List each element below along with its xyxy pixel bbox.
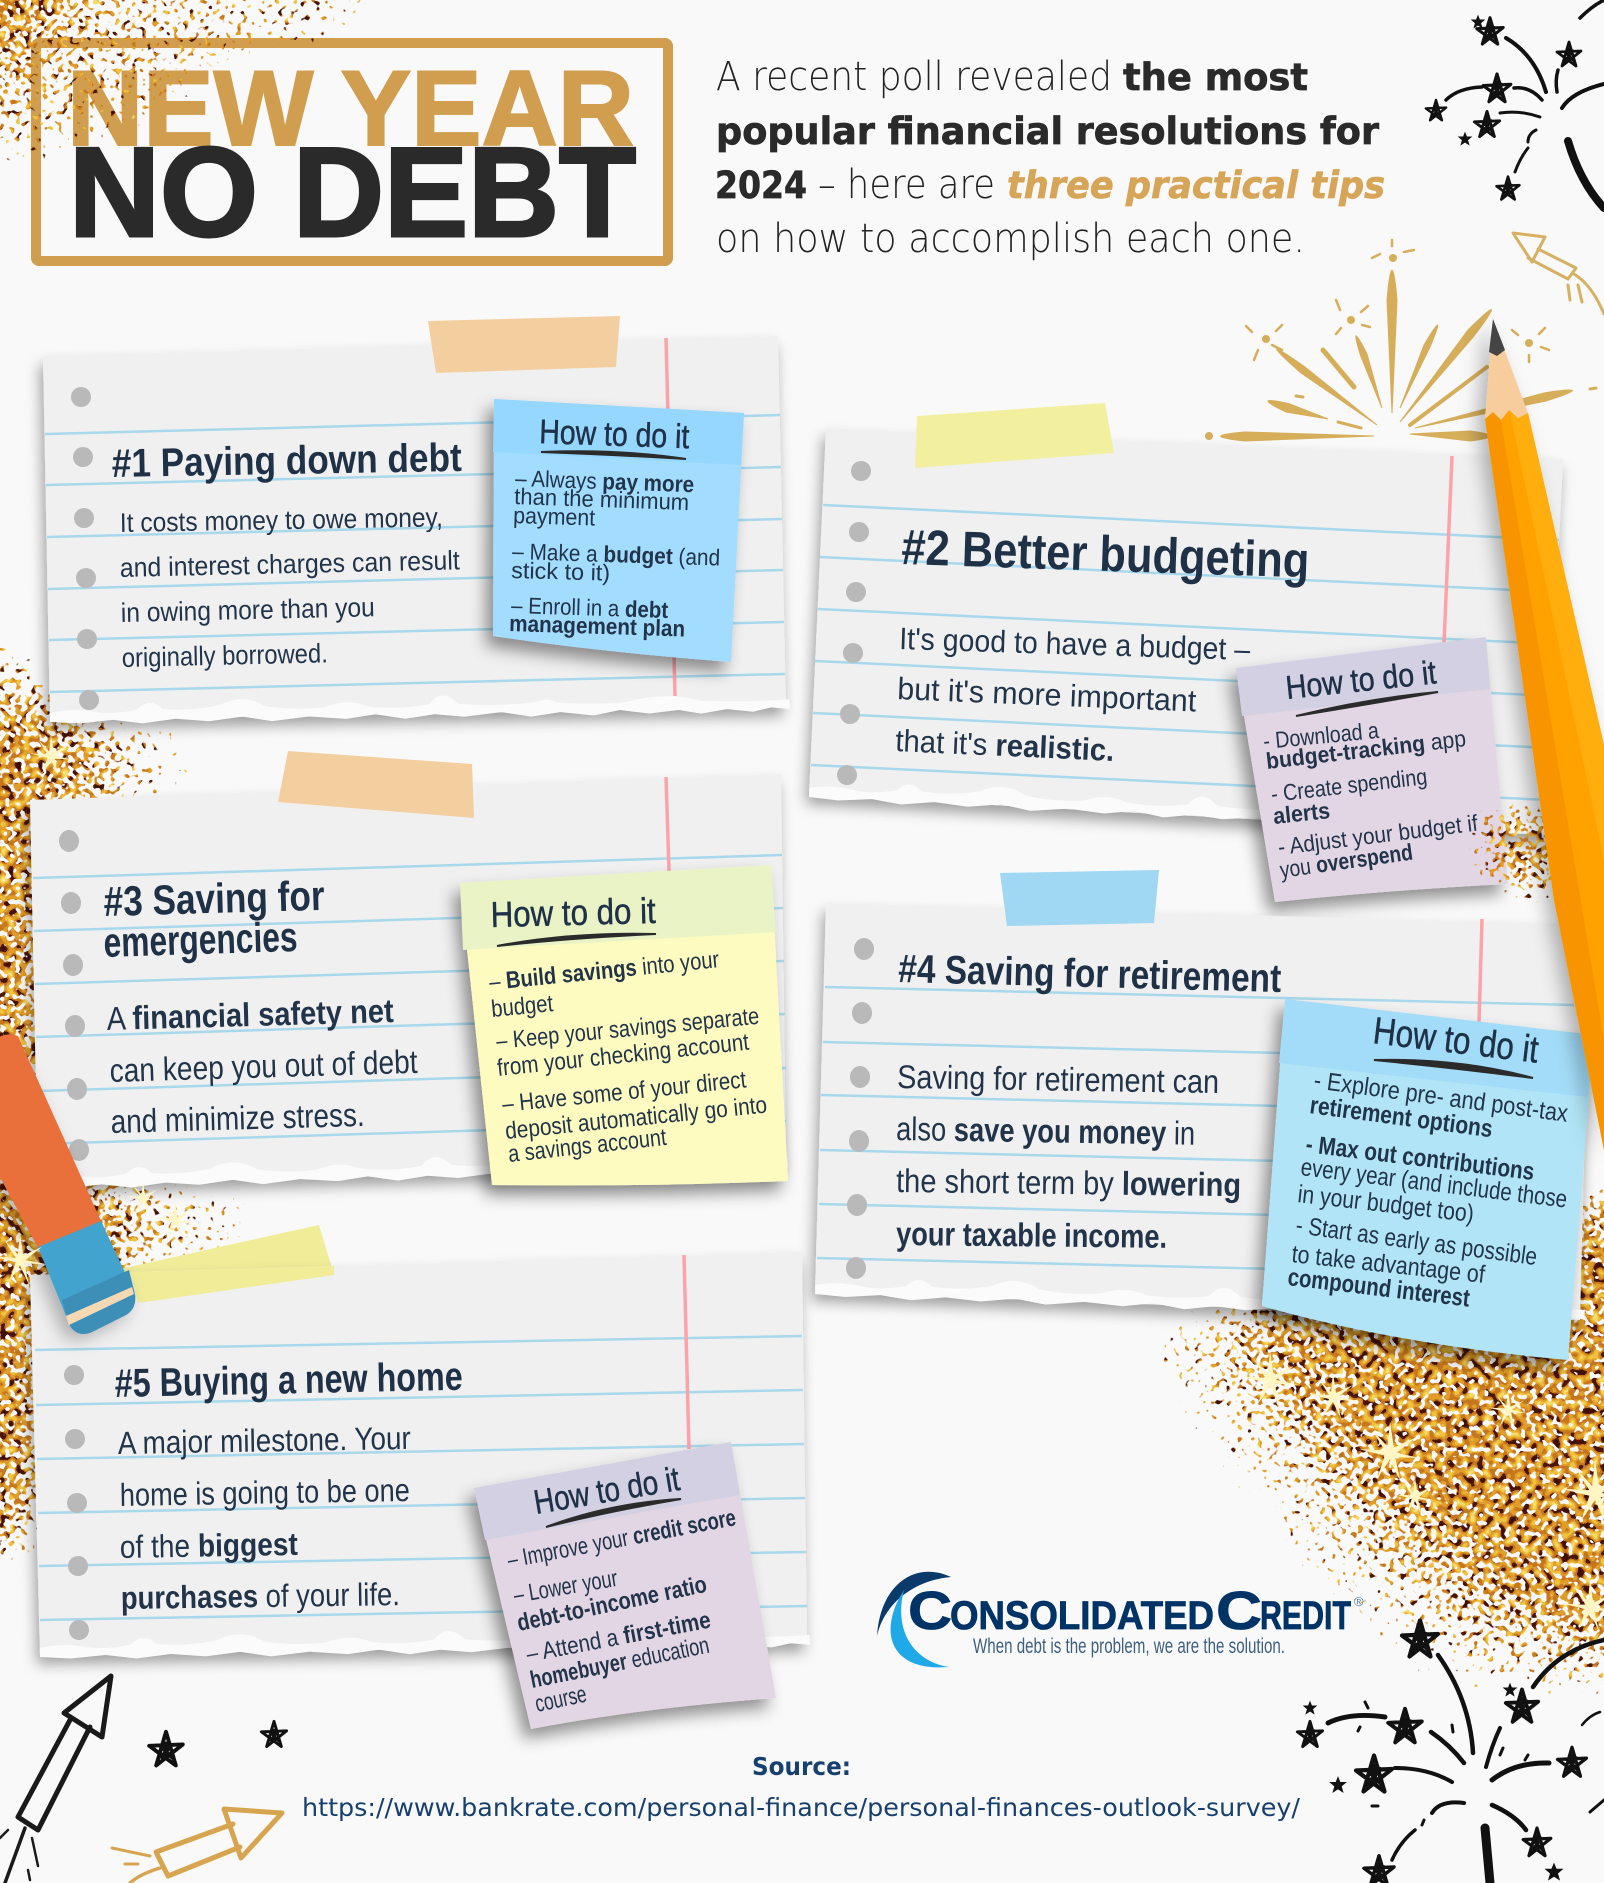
sticky note: how to do it: How to do it	[531, 1460, 683, 1522]
panel: card 2 better budgeting	[809, 403, 1563, 902]
sticky note: how to do it: – Attend a first-time	[524, 1607, 713, 1668]
paper sheet	[43, 336, 786, 720]
sticky note: how to do it: debt-to-income ratio	[515, 1571, 709, 1637]
sticky note: how to do it: – Lower your	[512, 1565, 620, 1609]
source heading: Source:	[752, 1752, 851, 1781]
sticky note: how to do it	[1262, 999, 1594, 1360]
sticky note: how to do it: – Enroll in a debt	[511, 592, 669, 623]
body text: home is going to be one	[119, 1472, 410, 1513]
sticky note: how to do it: - Adjust your budget if	[1276, 810, 1480, 860]
sticky note: how to do it: How to do it	[1284, 653, 1438, 706]
heading	[103, 872, 325, 966]
sticky note: how to do it: compound interest	[1286, 1263, 1472, 1313]
logo wordmark: ONSOLIDATED	[950, 1594, 1214, 1638]
body text: that it's realistic.	[895, 723, 1115, 768]
sticky note: how to do it: - Create spending	[1270, 763, 1429, 807]
body text: It's good to have a budget –	[899, 621, 1251, 667]
logo: Consolidated Credit: ®	[1354, 1594, 1364, 1609]
icon: pencil	[1485, 319, 1604, 1150]
sticky note: how to do it: – Keep your savings separate	[495, 1003, 760, 1055]
sticky note: how to do it: than the minimum	[514, 483, 690, 515]
body text: also save you money in	[896, 1110, 1195, 1152]
panel: card 1 paying down debt	[43, 316, 790, 725]
sticky note: how to do it: you overspend	[1278, 839, 1414, 883]
icon: black rocket	[0, 1676, 111, 1883]
sticky note: how to do it	[474, 1442, 776, 1729]
body text: purchases of your life.	[121, 1576, 400, 1616]
gold glitter background	[0, 560, 1604, 1740]
sticky note: how to do it: - Start as early as possible	[1294, 1211, 1539, 1271]
body text: but it's more important	[897, 671, 1197, 719]
icon: eraser	[0, 1034, 135, 1334]
sticky note: how to do it: a savings account	[507, 1124, 668, 1168]
sticky note: how to do it: deposit automatically go into	[504, 1092, 768, 1145]
icon: gold rocket bottom	[112, 1809, 282, 1883]
logo crescent	[877, 1572, 951, 1636]
body text: A financial safety net	[106, 992, 394, 1037]
firework: gold burst	[1205, 240, 1596, 441]
logo wordmark	[908, 1581, 1351, 1641]
sticky note: how to do it: - Explore pre- and post-tax	[1312, 1066, 1570, 1128]
body text: of the biggest	[119, 1526, 298, 1565]
paper sheet	[30, 774, 786, 1185]
firework: black bottom right	[1297, 1620, 1604, 1883]
body text: the short term by lowering	[896, 1162, 1241, 1203]
body text: It costs money to owe money,	[120, 502, 443, 538]
sticky note: how to do it	[493, 399, 744, 662]
body text: A major milestone. Your	[117, 1420, 411, 1461]
sticky note: how to do it	[1236, 637, 1508, 902]
sticky note: how to do it: stick to it)	[511, 557, 611, 586]
body text: and minimize stress.	[110, 1096, 365, 1140]
sticky note: how to do it: course	[533, 1681, 589, 1718]
paper sheet	[30, 1252, 807, 1655]
sticky note: how to do it: – Build savings into your	[488, 946, 720, 996]
intro paragraph: the most	[1123, 56, 1308, 99]
sticky note: how to do it: alerts	[1272, 797, 1331, 829]
heading: #4 Saving for retirement	[898, 947, 1282, 1001]
sticky note: how to do it	[460, 865, 788, 1186]
sticky note: how to do it: - Download a	[1262, 717, 1380, 754]
logo tagline: When debt is the problem, we are the solution.	[973, 1635, 1285, 1658]
intro paragraph: popular financial resolutions for	[716, 110, 1380, 153]
firework: black top right	[1426, 0, 1604, 208]
intro paragraph: on how to accomplish each one.	[716, 216, 1305, 262]
sticky note: how to do it: How to do it	[490, 890, 656, 935]
paper sheet	[815, 903, 1590, 1320]
heading: #1 Paying down debt	[111, 436, 462, 486]
body text: and interest charges can result	[119, 545, 460, 583]
tape	[1000, 870, 1159, 926]
icon: doodle stars	[149, 1721, 287, 1765]
tape	[120, 1225, 334, 1303]
body text: your taxable income.	[896, 1215, 1167, 1255]
body text: Saving for retirement can	[897, 1058, 1219, 1100]
panel: card 5 buying a new home	[30, 1225, 810, 1729]
sticky note: how to do it: payment	[513, 502, 596, 531]
tape	[915, 403, 1114, 468]
tape	[428, 316, 620, 373]
intro paragraph	[715, 54, 1385, 262]
intro paragraph: three practical tips	[1007, 164, 1385, 207]
body text	[117, 1420, 411, 1616]
intro paragraph: A recent poll revealed	[716, 54, 1112, 100]
heading: #5 Buying a new home	[114, 1355, 463, 1406]
title line: No Debt: NO DEBT	[69, 121, 636, 263]
body text: originally borrowed.	[121, 638, 328, 673]
sticky note: how to do it: – Make a budget (and	[512, 538, 721, 571]
heading: #3 Saving for	[103, 872, 325, 925]
sticky note: how to do it: from your checking account	[496, 1029, 751, 1082]
sticky note: how to do it: How to do it	[1371, 1010, 1541, 1072]
gold glitter overlay	[0, 0, 1604, 1340]
sticky note: how to do it: How to do it	[539, 413, 690, 456]
panel: card 4 saving for retirement	[815, 870, 1594, 1360]
paper sheet	[809, 428, 1563, 835]
source url: https://www.bankrate.com/personal-finance/personal-finances-outlook-survey/	[302, 1793, 1301, 1822]
title box	[36, 43, 668, 263]
sticky note: how to do it: – Always pay more	[515, 465, 695, 497]
sticky note: how to do it: - Max out contributions	[1304, 1130, 1536, 1186]
glitter sparkles	[0, 734, 1604, 1631]
sticky note: how to do it: – Have some of your direct	[501, 1066, 748, 1118]
sticky note: how to do it: retirement options	[1308, 1091, 1494, 1143]
tape	[278, 751, 474, 818]
sticky note: how to do it: budget-tracking app	[1265, 725, 1467, 774]
body text	[896, 1058, 1241, 1255]
sticky note: how to do it: to take advantage of	[1290, 1240, 1486, 1289]
heading: emergencies	[103, 913, 298, 966]
logo wordmark: REDIT	[1260, 1594, 1351, 1638]
heading: #2 Better budgeting	[901, 519, 1310, 589]
body text	[895, 621, 1251, 768]
logo: Consolidated Credit	[877, 1572, 1364, 1667]
logo wordmark: C	[908, 1581, 952, 1641]
icon: gold rocket top right	[1513, 233, 1604, 314]
intro paragraph: – here are	[818, 162, 995, 208]
logo wordmark: C	[1216, 1581, 1262, 1641]
sticky note: how to do it: homebuyer education	[528, 1632, 712, 1694]
body text	[106, 992, 418, 1140]
sticky note: how to do it: – Improve your credit score	[505, 1504, 738, 1574]
title line: New Year: NEW YEAR	[67, 48, 634, 168]
sticky note: how to do it: management plan	[509, 610, 686, 642]
body text	[119, 502, 460, 673]
sticky note: how to do it: in your budget too)	[1296, 1180, 1475, 1228]
body text: in owing more than you	[120, 592, 375, 628]
body text: can keep you out of debt	[109, 1043, 418, 1089]
sticky note: how to do it: budget	[490, 990, 555, 1023]
intro paragraph: 2024	[715, 164, 807, 207]
panel: card 3 saving for emergencies	[30, 751, 788, 1190]
